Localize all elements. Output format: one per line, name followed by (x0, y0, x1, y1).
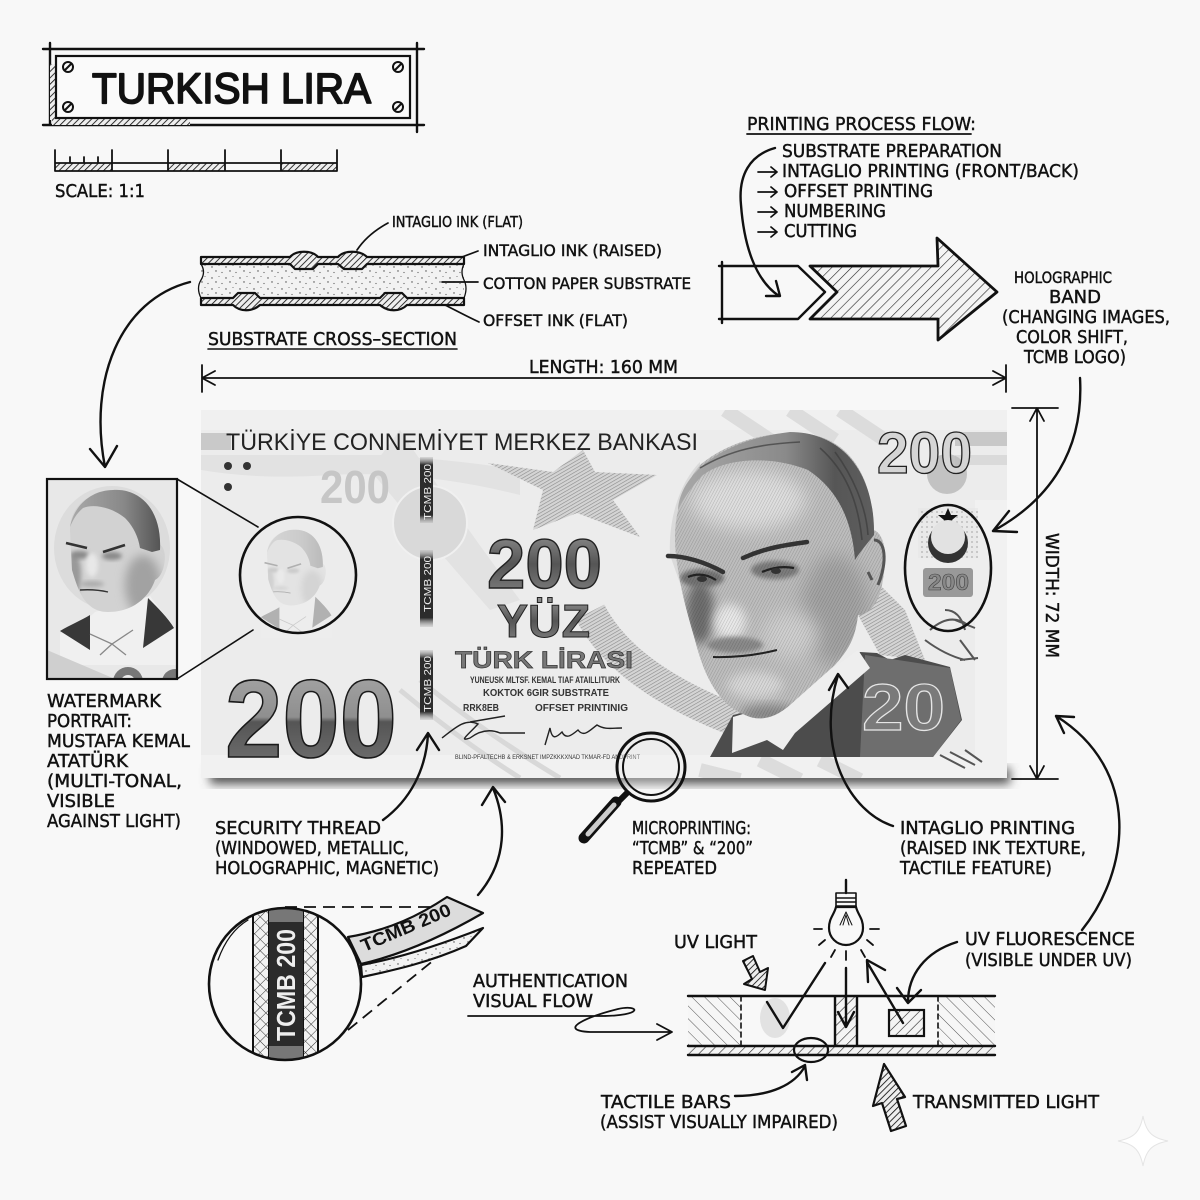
watermark label: AGAINST LIGHT) (47, 812, 181, 832)
UV fluorescence label: (VISIBLE UNDER UV) (965, 951, 1132, 971)
tactile bars label (600, 1093, 838, 1133)
arrow: holographic band (993, 378, 1080, 532)
length dimension (202, 358, 1006, 392)
banknote (201, 410, 1007, 781)
small banknote texts: KOKTOK 6GIR SUBSTRATE (483, 687, 609, 699)
arrow: flow list to process arrow (741, 148, 780, 296)
security thread label (215, 819, 439, 879)
substrate labels: INTAGLIO INK (RAISED) (483, 241, 662, 260)
crescent band (590, 612, 745, 724)
UV diagram (688, 960, 995, 1062)
width dimension: WIDTH: 72 MM (1041, 533, 1061, 658)
substrate labels: SUBSTRATE CROSS–SECTION (208, 330, 457, 350)
holographic band label: BAND (1049, 288, 1101, 308)
engraved portrait (660, 430, 962, 757)
scale bar (55, 150, 337, 202)
watermark label: WATERMARK (47, 692, 162, 712)
security thread magnified view (209, 905, 361, 1065)
security thread label: SECURITY THREAD (215, 819, 381, 839)
magnifying glass (584, 733, 685, 838)
printing process flow text: CUTTING (784, 222, 857, 242)
zoom circle: watermark (240, 517, 356, 633)
central denomination 200: 200 (487, 525, 602, 603)
small banknote texts: RRK8EB (463, 703, 499, 714)
dashed magnification lines (285, 907, 440, 1030)
large denomination 200: 200 (225, 658, 397, 781)
small banknote texts (455, 675, 640, 761)
watermark label: PORTRAIT: (47, 712, 132, 732)
microprinting label: “TCMB” & “200” (632, 839, 753, 859)
thread text: TCMB 200 (271, 929, 301, 1041)
arrow: UV fluorescence to note (1056, 716, 1119, 930)
watermark label: ATATÜRK (47, 750, 129, 772)
security thread segments: TCMB 200 (423, 463, 434, 520)
holographic band detail (905, 505, 991, 631)
scale label: SCALE: 1:1 (55, 182, 145, 202)
holographic band label: COLOR SHIFT, (1016, 328, 1128, 348)
watermark label: VISIBLE (47, 792, 115, 812)
round seal (927, 454, 967, 494)
braille dots (224, 462, 251, 491)
arrow: authentication flow squiggle (468, 1008, 672, 1040)
ribbon text: TCMB 200 (358, 900, 454, 956)
YÜZ: YÜZ (497, 595, 590, 647)
substrate labels: COTTON PAPER SUBSTRATE (483, 274, 691, 293)
authentication flow label: VISUAL FLOW (473, 992, 593, 1012)
arrow: intaglio printing (829, 674, 893, 826)
small banknote texts: BLIND-PFALTECHB & ERKSNET IMPZKKKXNAD TKMAR-FD ANDPRINT (455, 755, 640, 761)
substrate labels: INTAGLIO INK (FLAT) (392, 213, 523, 231)
arrow: security thread (383, 733, 439, 820)
security thread segments (420, 457, 434, 720)
watermark inset portrait (46, 478, 178, 680)
small banknote texts: YUNEUSK MLTSF. KEMAL TIAF ATAILLITURK (470, 675, 620, 685)
printing process flow text: OFFSET PRINTING (784, 182, 933, 202)
holographic band label: TCMB LOGO) (1023, 348, 1126, 368)
UV fluorescence label (965, 930, 1135, 971)
portrait-side denomination 20: 20 (862, 670, 945, 744)
arrow: thread inset to note (478, 787, 505, 895)
intaglio printing label: (RAISED INK TEXTURE, (900, 839, 1086, 859)
arrow: tactile bars (735, 1065, 807, 1096)
signatures (442, 716, 622, 745)
TÜRK LİRASI: TÜRK LİRASI (455, 647, 633, 674)
tactile bars label: (ASSIST VISUALLY IMPAIRED) (600, 1113, 838, 1133)
width dimension (1012, 408, 1061, 779)
printing process flow text: SUBSTRATE PREPARATION (782, 142, 1002, 162)
intaglio printing label: TACTILE FEATURE) (899, 859, 1052, 879)
thread ribbon (348, 897, 483, 977)
holographic band label (1002, 268, 1170, 368)
bank name: TÜRKİYE CONNEMİYET MERKEZ BANKASI (226, 429, 698, 456)
security thread label: HOLOGRAPHIC, MAGNETIC) (215, 859, 439, 879)
watermark label (47, 692, 190, 832)
arrow: transmitted light (873, 1064, 906, 1131)
printing process flow text: NUMBERING (784, 202, 886, 222)
watermark label: (MULTI-TONAL, (47, 772, 182, 792)
watermark label: MUSTAFA KEMAL (47, 732, 190, 752)
holographic band label: HOLOGRAPHIC (1014, 268, 1112, 287)
watermark portrait (261, 530, 333, 638)
process stage box (719, 262, 825, 323)
substrate labels: OFFSET INK (FLAT) (483, 311, 628, 330)
substrate labels (208, 213, 691, 350)
substrate cross-section diagram (198, 252, 466, 310)
title text: TURKISH LIRA (92, 65, 371, 113)
microprinting label: MICROPRINTING: (632, 819, 751, 839)
printing process flow text (747, 115, 1079, 242)
star (488, 450, 657, 537)
authentication flow label (473, 972, 628, 1012)
light rays (767, 960, 903, 1028)
arrow: cross-section to watermark inset (90, 282, 190, 467)
intaglio printing label: INTAGLIO PRINTING (900, 819, 1075, 839)
icon: light bulb (814, 880, 879, 960)
microprinting label: REPEATED (632, 859, 717, 879)
security thread label: (WINDOWED, METALLIC, (215, 839, 409, 859)
authentication flow label: AUTHENTICATION (473, 972, 628, 992)
small banknote texts: OFFSET PRINTINIG (535, 702, 628, 714)
zoom connector lines (177, 479, 258, 679)
holographic band label: (CHANGING IMAGES, (1002, 308, 1170, 328)
microprinting label (632, 819, 753, 879)
hologram disc (393, 486, 467, 560)
tactile bars label: TACTILE BARS (600, 1093, 731, 1113)
transmitted light label: TRANSMITTED LIGHT (912, 1093, 1099, 1113)
UV fluorescence label: UV FLUORESCENCE (965, 930, 1135, 950)
UV light label: UV LIGHT (674, 933, 757, 953)
process hatched arrow (810, 238, 997, 340)
top-right denomination 200: 200 (877, 421, 972, 486)
book and stripes details (925, 640, 982, 768)
security thread segments: TCMB 200 (423, 655, 434, 712)
length dimension: LENGTH: 160 MM (529, 358, 678, 378)
icon: sparkle (1118, 1116, 1168, 1166)
banknote shadow (210, 768, 1010, 784)
printing process flow text: PRINTING PROCESS FLOW: (747, 115, 976, 135)
arrow: UV light (743, 956, 768, 990)
title plate (43, 43, 424, 132)
holographic band detail: 200 (928, 569, 969, 595)
ghost 200: 200 (320, 461, 390, 513)
printing process flow text: INTAGLIO PRINTING (FRONT/BACK) (782, 162, 1079, 182)
security thread segments: TCMB 200 (423, 555, 434, 612)
arrow: UV fluorescence to square (897, 942, 957, 1003)
intaglio printing label (899, 819, 1086, 879)
note base (201, 410, 1007, 778)
